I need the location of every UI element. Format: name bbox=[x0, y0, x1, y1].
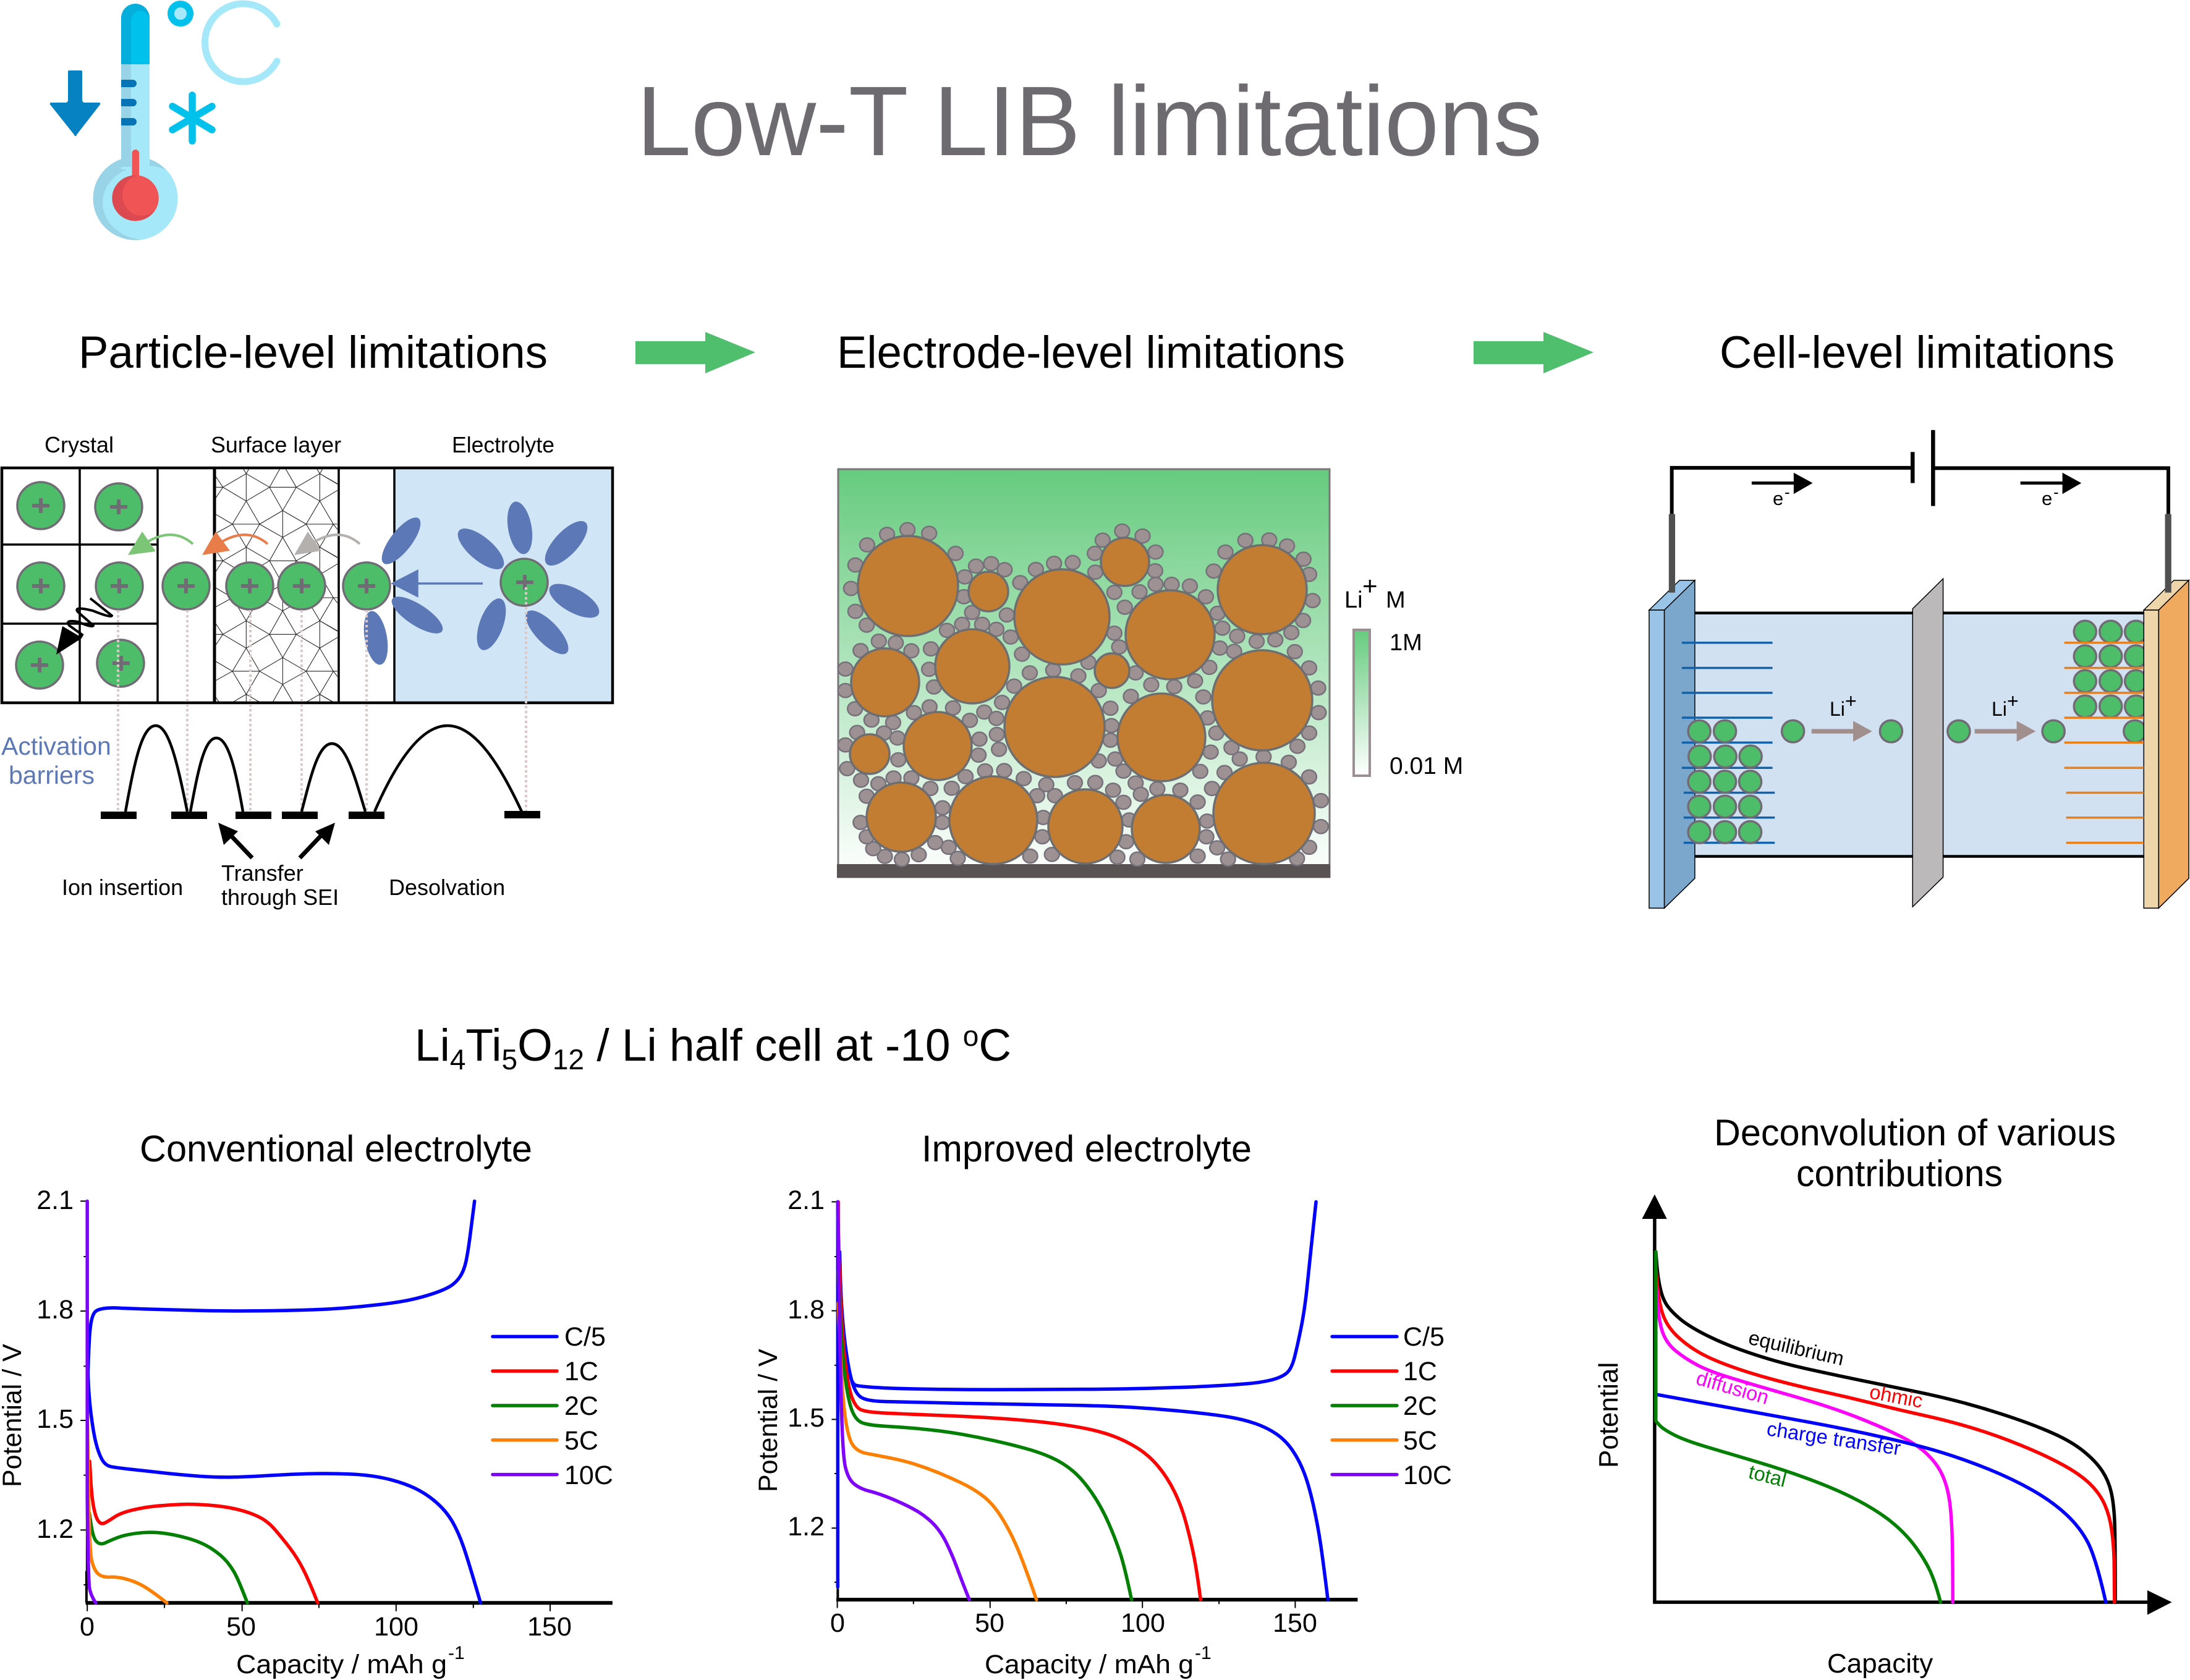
arrow: spring ion insertion bbox=[56, 598, 112, 655]
chart title: Deconvolution of various bbox=[1714, 1112, 2116, 1153]
label: Li+ right: Li bbox=[1992, 698, 2007, 720]
label: diffusion: diffusion bbox=[1694, 1367, 1772, 1409]
curve: 10C bbox=[838, 1202, 969, 1600]
y tick labels: 1.8 bbox=[787, 1295, 825, 1325]
curve: diffusion bbox=[1656, 1281, 1953, 1602]
section heading: / Li half cell at -10 bbox=[584, 1020, 963, 1071]
left electrode layers bbox=[1682, 643, 1775, 843]
text: activation barriers: barriers bbox=[9, 761, 95, 789]
colour bar bbox=[1354, 630, 1370, 776]
free Li ions bbox=[1782, 720, 2065, 742]
legend labels: 1C bbox=[564, 1357, 598, 1386]
x axis arrow bbox=[1653, 1590, 2172, 1615]
arrow: to SEI right bbox=[300, 823, 335, 858]
arrow: to SEI left bbox=[218, 823, 252, 858]
icon: thermometer bulb bbox=[93, 159, 178, 240]
heading: electrode-level: Electrode-level limitations bbox=[837, 328, 1345, 378]
curve: 2C bbox=[89, 1513, 247, 1603]
x tick labels: 50 bbox=[226, 1612, 256, 1642]
tabs bbox=[1669, 514, 2171, 593]
label: Li+ right: + bbox=[2007, 690, 2019, 712]
label: Li+ left: + bbox=[1845, 690, 1857, 712]
active material particles bbox=[850, 536, 1315, 864]
chart title: Improved electrolyte bbox=[922, 1128, 1252, 1169]
label: charge transfer: charge transfer bbox=[1765, 1417, 1903, 1459]
y tick labels: 1.2 bbox=[787, 1512, 825, 1542]
electrolyte region bbox=[394, 468, 613, 703]
legend labels bbox=[1403, 1322, 1452, 1490]
battery symbol bbox=[1912, 430, 1933, 506]
title: Low-T LIB limitations bbox=[637, 66, 1542, 176]
solvent molecules bbox=[360, 499, 605, 666]
section heading: 5 bbox=[502, 1043, 517, 1075]
section heading: O bbox=[517, 1020, 553, 1071]
axes bbox=[831, 1202, 1357, 1608]
label: Li+ left: Li bbox=[1830, 698, 1845, 720]
legend labels: 10C bbox=[1403, 1461, 1452, 1490]
x axis label: Capacity / mAh g bbox=[985, 1650, 1194, 1679]
label: Li+ left bbox=[1830, 690, 1857, 720]
arrow: electron right bbox=[2021, 473, 2081, 494]
plot curves and axes bbox=[831, 1202, 1397, 1608]
curve: ohmic bbox=[1656, 1268, 2115, 1602]
label: Electrolyte: Electrolyte bbox=[452, 432, 554, 457]
legend labels bbox=[564, 1322, 613, 1490]
label: Li+ right bbox=[1992, 690, 2019, 720]
icon: red mercury bbox=[112, 150, 161, 221]
label: e- left: - bbox=[1785, 483, 1790, 501]
legend labels: C/5 bbox=[564, 1322, 606, 1352]
y tick labels: 2.1 bbox=[787, 1186, 825, 1215]
legend: Li+ M label: + bbox=[1362, 571, 1378, 600]
label: total: total bbox=[1746, 1461, 1789, 1491]
right electrode bbox=[2144, 580, 2189, 908]
y axis label: Potential bbox=[1594, 1362, 1624, 1468]
arrow: green hop bbox=[128, 532, 193, 555]
y tick labels: 1.5 bbox=[36, 1404, 74, 1434]
chart title: Conventional electrolyte bbox=[140, 1128, 532, 1169]
thermometer icon bbox=[50, 4, 277, 240]
chart: improved electrolyte bbox=[753, 1128, 1452, 1679]
y tick labels: 1.8 bbox=[36, 1295, 74, 1325]
curve: C/5 discharge bbox=[838, 1202, 1328, 1600]
arrow: desolvation bbox=[393, 571, 483, 596]
legend labels: C/5 bbox=[1403, 1322, 1445, 1352]
y tick labels: 1.5 bbox=[787, 1403, 825, 1433]
curve: C/5 charge bbox=[87, 1201, 475, 1400]
legend labels: 5C bbox=[1403, 1426, 1437, 1456]
section heading: C bbox=[978, 1020, 1011, 1071]
arrow: particle to electrode bbox=[635, 332, 755, 373]
text: transfer through SEI: through SEI bbox=[221, 885, 339, 910]
electrolyte concentration field bbox=[838, 469, 1330, 877]
curve: 5C bbox=[838, 1304, 1037, 1600]
x tick labels: 100 bbox=[374, 1612, 418, 1642]
curve: 10C bbox=[87, 1201, 96, 1603]
plot curves and axes bbox=[80, 1201, 613, 1611]
y axis arrow bbox=[1642, 1194, 1667, 1603]
label: e- right: - bbox=[2053, 483, 2059, 501]
chart: conventional electrolyte bbox=[0, 1128, 613, 1679]
plot curves and axes bbox=[1642, 1194, 2172, 1615]
curve: charge transfer bbox=[1657, 1394, 2106, 1602]
x tick labels: 150 bbox=[527, 1612, 572, 1642]
legend lines bbox=[1332, 1336, 1397, 1475]
y tick labels bbox=[36, 1186, 74, 1544]
icon: snowflake asterisk bbox=[172, 95, 212, 141]
y axis label: Potential / V bbox=[753, 1349, 783, 1492]
surface layer mesh bbox=[216, 469, 337, 702]
curve: 2C bbox=[838, 1271, 1132, 1600]
colour bar label: 0.01 M: 0.01 M bbox=[1390, 753, 1463, 779]
dotted guide lines bbox=[118, 587, 526, 815]
panel: particle-level diagram bbox=[1, 400, 613, 910]
text: desolvation: Desolvation bbox=[389, 875, 505, 900]
Li ions in crystal bbox=[16, 482, 548, 689]
curve: 5C bbox=[87, 1403, 167, 1603]
conductive carbon particles bbox=[838, 523, 1328, 867]
chart: deconvolution of contributions bbox=[1594, 1112, 2172, 1679]
cell schematic bbox=[1649, 430, 2189, 908]
axes bbox=[80, 1201, 613, 1611]
arrow: orange hop bbox=[202, 532, 268, 555]
chart title: contributions bbox=[1796, 1153, 2003, 1194]
lattice frame bbox=[1, 468, 613, 703]
chart title bbox=[1714, 1112, 2116, 1194]
legend labels: 1C bbox=[1403, 1357, 1437, 1386]
label: e- right bbox=[2042, 483, 2059, 509]
x axis label: Capacity bbox=[1827, 1648, 1933, 1679]
section heading: Li bbox=[415, 1020, 450, 1071]
label: equilibrium: equilibrium bbox=[1746, 1326, 1846, 1370]
activation barrier curves bbox=[125, 726, 522, 812]
heading: cell-level: Cell-level limitations bbox=[1720, 328, 2115, 378]
y tick labels: 2.1 bbox=[36, 1186, 74, 1215]
x tick labels bbox=[830, 1608, 1317, 1638]
icon: letter C bbox=[205, 4, 277, 82]
external circuit bbox=[1672, 468, 2168, 514]
text: ion insertion: Ion insertion bbox=[62, 875, 183, 900]
arrow: electron left bbox=[1752, 473, 1813, 494]
legend lines bbox=[493, 1336, 557, 1475]
x axis label: -1 bbox=[1195, 1643, 1212, 1663]
left electrode bbox=[1649, 580, 1695, 908]
section heading: Ti bbox=[465, 1020, 502, 1071]
arrow: Li+ left bbox=[1812, 721, 1872, 742]
heading: particle-level: Particle-level limitations bbox=[79, 328, 548, 378]
separator bbox=[1912, 579, 1943, 907]
legend labels: 10C bbox=[564, 1461, 613, 1490]
text: activation barriers: Activation bbox=[1, 732, 111, 760]
panel: electrode-level diagram bbox=[837, 469, 1463, 878]
legend labels: 2C bbox=[564, 1391, 598, 1421]
curve: C/5 discharge bbox=[87, 1345, 480, 1603]
x tick labels: 100 bbox=[1121, 1608, 1165, 1638]
Li ions at left electrode bbox=[1688, 720, 1762, 843]
label: ohmic: ohmic bbox=[1868, 1380, 1925, 1412]
text: transfer through SEI: Transfer bbox=[221, 860, 303, 886]
barrier levels bbox=[101, 811, 540, 819]
curve: 1C bbox=[838, 1202, 1200, 1600]
arrow: grey hop bbox=[294, 532, 360, 555]
legend: Li+ M label: M bbox=[1386, 587, 1406, 613]
y tick labels bbox=[787, 1186, 825, 1542]
x tick labels: 50 bbox=[975, 1608, 1004, 1638]
label: Surface layer: Surface layer bbox=[211, 432, 341, 457]
label: Crystal: Crystal bbox=[45, 432, 114, 457]
legend labels: 5C bbox=[564, 1426, 598, 1456]
label: e- right: e bbox=[2042, 488, 2052, 509]
curve: 1C bbox=[90, 1461, 318, 1603]
icon: thermometer ticks bbox=[121, 80, 137, 125]
icon: degree sign bbox=[171, 4, 190, 23]
x axis label: -1 bbox=[448, 1643, 465, 1663]
current collector bbox=[837, 864, 1330, 878]
curve: total bbox=[1656, 1252, 1940, 1602]
right electrode layers bbox=[2065, 643, 2144, 843]
x tick labels: 150 bbox=[1273, 1608, 1317, 1638]
x axis label: Capacity / mAh g bbox=[236, 1650, 447, 1679]
label: e- left: e bbox=[1773, 488, 1783, 509]
curve: equilibrium bbox=[1656, 1252, 2115, 1602]
arrow: Li+ right bbox=[1975, 721, 2035, 742]
x tick labels bbox=[80, 1612, 572, 1642]
y tick labels: 1.2 bbox=[36, 1514, 74, 1544]
legend: Li+ M label: Li bbox=[1344, 587, 1363, 613]
x tick labels: 0 bbox=[80, 1612, 95, 1642]
arrow: electrode to cell bbox=[1474, 332, 1594, 373]
text: activation barriers bbox=[1, 732, 111, 789]
text: transfer through SEI bbox=[221, 860, 339, 910]
panel: cell-level diagram bbox=[1649, 430, 2189, 908]
legend labels: 2C bbox=[1403, 1391, 1437, 1421]
electrolyte bbox=[1696, 613, 2144, 857]
Li ions at right electrode bbox=[2074, 621, 2147, 742]
curve: C/5 charge bbox=[838, 1202, 1316, 1587]
legend: Li+ M label bbox=[1344, 571, 1406, 613]
section heading: 4 bbox=[450, 1043, 465, 1075]
section heading: o bbox=[963, 1020, 978, 1052]
icon: down arrow bbox=[50, 70, 100, 136]
icon: thermometer tube bbox=[121, 4, 150, 169]
section heading: 12 bbox=[553, 1043, 584, 1075]
colour bar label: 1M: 1M bbox=[1390, 630, 1422, 656]
x tick labels: 0 bbox=[830, 1608, 845, 1638]
label: e- left bbox=[1773, 483, 1790, 509]
